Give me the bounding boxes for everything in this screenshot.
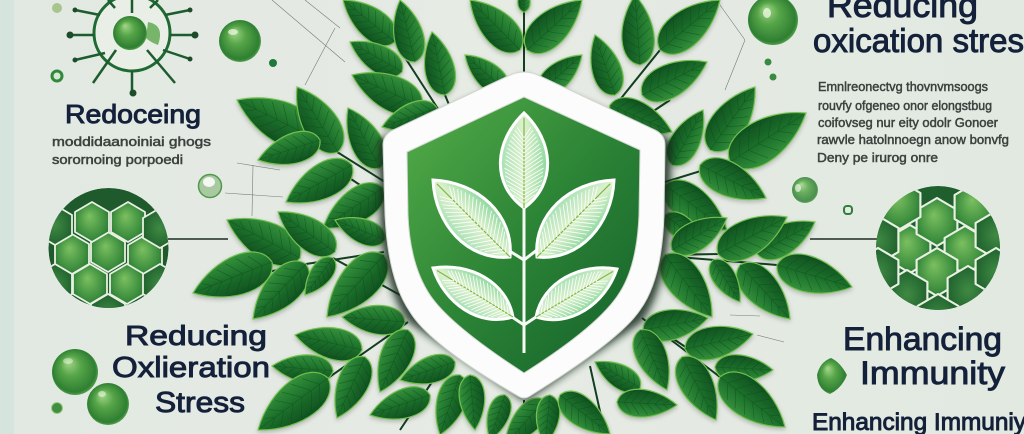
lower left heading [112,320,270,419]
lower right heading: Immunity [860,355,1005,391]
leaf stems [230,8,810,434]
icon: green spheres lower left [52,349,129,425]
shield shadow [378,76,672,402]
left small text [52,135,211,167]
icon: virus molecule [66,0,198,96]
left small text: sorornoing porpoedi [52,153,183,167]
right paragraph: coifovseg nur eity odolr Gonoer [818,115,999,130]
icon: blurred sphere right [792,177,852,214]
top right heading [813,0,1024,59]
leaves: bottom centre cluster [365,324,646,434]
top right heading: oxication stres [813,22,1024,59]
plant stem [508,208,537,353]
left heading: Redoceing [65,99,201,129]
leaves: top left cluster [228,78,394,242]
right paragraph: Deny pe irurog onre [817,150,938,165]
lower left heading: Stress [155,387,245,419]
icon: small dots right [764,58,776,80]
lower left heading: Oxlieration [112,352,270,384]
icon: green sphere top left [219,20,261,62]
icon: small dots top left [52,3,277,81]
connector: right honeycomb to leaves [810,238,877,240]
lower right heading [843,321,1005,391]
right paragraph [817,79,1009,165]
right paragraph: Emnlreonectvg thovnvmsoogs [818,79,988,94]
plant leaves [416,113,631,333]
left small text: moddidaanoiniai ghogs [52,135,211,149]
thin connector lines [225,0,784,342]
leaves: lower left cluster [186,199,406,434]
right paragraph: rawvle hatolnnoegn anow bonvfg [817,132,1009,147]
icon: green sphere top right [748,0,798,45]
leaves: top centre cluster [333,0,732,146]
icon: irregular green blob [817,358,847,394]
connector: left honeycomb to leaves [168,238,228,240]
leaves: lower right cluster [616,201,857,434]
icon: right honeycomb sphere [876,186,1000,310]
shield outer frame [383,72,665,398]
shield emblem [383,72,665,398]
leaves: top right cluster [655,77,817,254]
right paragraph: rouvfy ofgeneo onor elongstbug [818,98,992,113]
shield green field [407,97,640,373]
icon: glass sphere [198,174,222,198]
icon: left honeycomb sphere [48,188,168,308]
lower left heading: Reducing [125,320,267,351]
lower right heading: Enhancing [843,321,1002,357]
